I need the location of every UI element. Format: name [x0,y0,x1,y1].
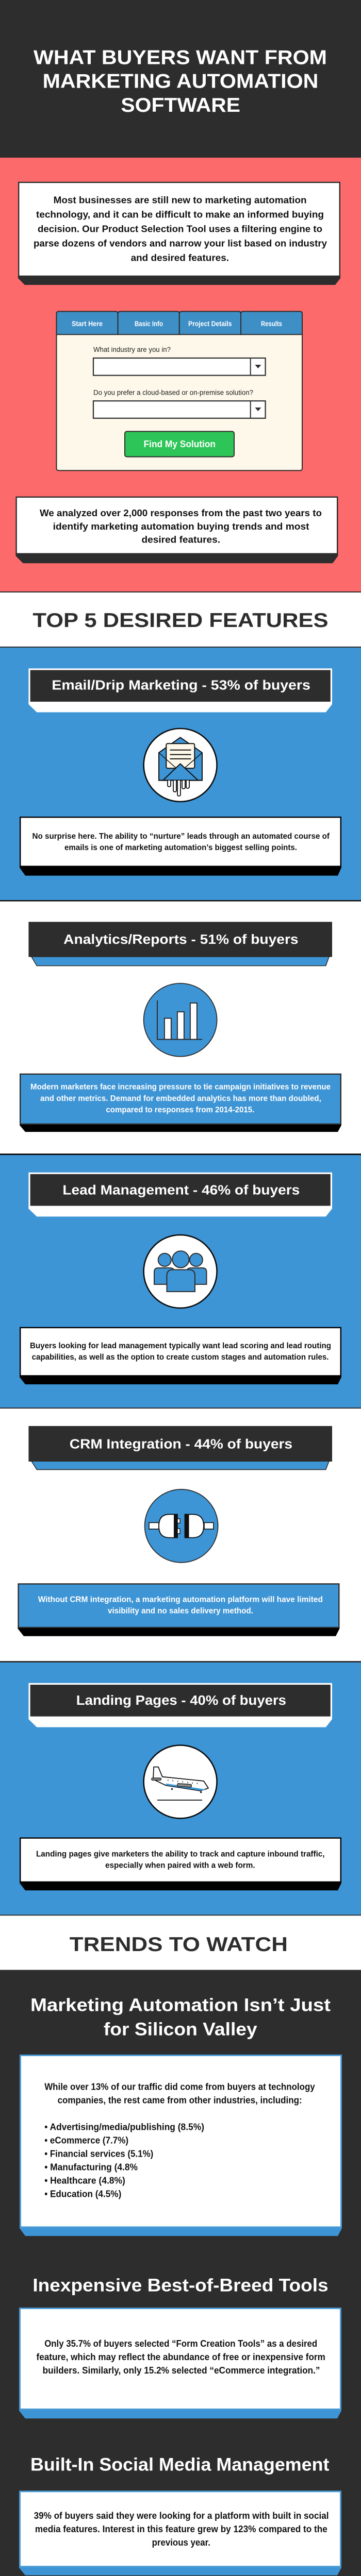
title: MARKETING AUTOMATION [43,71,318,93]
feature heading: Analytics/Reports - 51% of buyers [63,933,299,947]
methodology text box: desired features. [141,534,220,545]
industry list: • Healthcare (4.8%) [44,2175,125,2186]
title [34,46,327,116]
panel: crm integration [0,1409,361,1661]
industries text box: companies, the rest came from other industries, including: [58,2095,302,2105]
industry dropdown: What industry are you in? [93,346,171,353]
form tabs: Start Here [72,320,103,328]
feature heading: Lead Management - 46% of buyers [62,1183,300,1198]
product selection tool form [57,311,302,470]
heading: trends to watch: TRENDS TO WATCH [70,1934,288,1956]
panel: analytics/reports [0,902,361,1154]
description box: Modern marketers face increasing pressure to tie campaign initiatives to revenue [30,1083,331,1092]
intro text box: decision. Our Product Selection Tool uses a filtering engine to [38,224,322,234]
form tabs [57,311,302,334]
icon: group of people [144,1235,217,1308]
title: WHAT BUYERS WANT FROM [34,46,327,69]
heading: top 5 desired features [0,592,361,647]
feature heading [28,922,332,965]
icon: plug and socket [145,1489,218,1563]
description box: especially when paired with a web form. [105,1861,255,1870]
methodology text box: We analyzed over 2,000 responses from the past two years to [40,507,322,518]
heading: top 5 desired features: TOP 5 DESIRED FEATURES [32,609,329,632]
description box: Without CRM integration, a marketing automation platform will have limited [38,1595,323,1604]
social media text box: previous year. [152,2537,210,2548]
description box: No surprise here. The ability to “nurture” leads through an automated course of [32,832,330,841]
industry list [44,2121,204,2199]
description box: and other metrics. Demand for embedded analytics has more than doubled, [40,1094,321,1103]
trend heading: social media management: Built-In Social Media Management [30,2454,330,2475]
description box [20,1074,341,1132]
social media text box: 39% of buyers said they were looking for a platform with built in social [34,2510,329,2521]
trend heading: silicon valley [30,1995,331,2039]
form tabs: Project Details [188,320,232,328]
industry dropdown [93,346,266,376]
methodology text box: identify marketing automation buying trends and most [53,521,309,532]
icon: landing airplane [144,1745,217,1818]
industries text box: While over 13% of our traffic did come from buyers at technology [44,2081,315,2092]
intro text box: and desired features. [131,252,229,263]
best-of-breed text box: Only 35.7% of buyers selected “Form Creation Tools” as a desired [44,2338,317,2349]
description box [18,1584,339,1636]
trend heading: best-of-breed tools: Inexpensive Best-of-Breed Tools [32,2275,329,2296]
icon: bar chart [144,984,217,1057]
panel: landing pages [0,1663,361,1914]
intro text box [18,182,340,285]
find my solution button: Find My Solution [144,439,216,449]
trend heading: silicon valley: for Silicon Valley [104,2019,257,2039]
panel: trends [0,1970,361,2576]
best-of-breed text box: builders. Similarly, only 15.2% selected “eCommerce integration.” [43,2365,320,2376]
description box: Landing pages give marketers the ability to track and capture inbound traffic, [36,1850,325,1859]
intro text box: Most businesses are still new to marketing automation [54,195,307,206]
best-of-breed text box [19,2308,341,2418]
industry list: • Advertising/media/publishing (8.5%) [44,2121,204,2132]
methodology text box [15,497,338,563]
panel: lead management [0,1155,361,1408]
description box [20,1838,341,1890]
title: SOFTWARE [121,94,240,116]
intro text box: parse dozens of vendors and narrow your list based on industry [34,238,327,249]
trend heading: silicon valley: Marketing Automation Isn’t Just [30,1995,331,2015]
form tabs: Basic Info [135,320,163,328]
social media text box [19,2492,341,2575]
description box: capabilities, as well as the option to create custom stages and automation rules. [32,1353,329,1362]
description box: Buyers looking for lead management typically want lead scoring and lead routing [30,1342,331,1350]
panel: email/drip marketing [0,648,361,900]
panel: introduction [0,158,361,591]
description box: emails is one of marketing automation’s biggest selling points. [64,843,297,852]
best-of-breed text box: feature, which may reflect the abundance of free or inexpensive form [36,2351,325,2362]
icon: envelope with drips [144,728,217,802]
industry list: • eCommerce (7.7%) [44,2134,128,2145]
feature heading: Email/Drip Marketing - 53% of buyers [52,679,310,693]
deployment dropdown: Do you prefer a cloud-based or on-premise solution? [93,388,253,396]
description box: visibility and no sales delivery method. [108,1606,253,1615]
heading: trends to watch [0,1916,361,1970]
industry list: • Manufacturing (4.8% [44,2162,138,2172]
feature heading [28,1426,332,1469]
feature heading [28,1684,332,1727]
feature heading: Landing Pages - 40% of buyers [76,1693,286,1708]
industry list: • Financial services (5.1%) [44,2148,153,2159]
description box [20,817,341,876]
social media text box: media features. Interest in this feature grew by 123% compared to the [35,2523,327,2534]
industries text box [20,2055,342,2236]
industry list: • Education (4.5%) [44,2189,121,2199]
form tabs: Results [261,320,282,328]
feature heading [28,1173,332,1216]
feature heading: CRM Integration - 44% of buyers [70,1437,292,1451]
feature heading [28,669,332,712]
panel: title header [0,0,361,158]
intro text box: technology, and it can be difficult to make an informed buying [36,209,324,219]
deployment dropdown [93,388,266,418]
find my solution button [125,431,234,457]
description box [20,1328,341,1384]
description box: compared to responses from 2014-2015. [106,1106,254,1114]
